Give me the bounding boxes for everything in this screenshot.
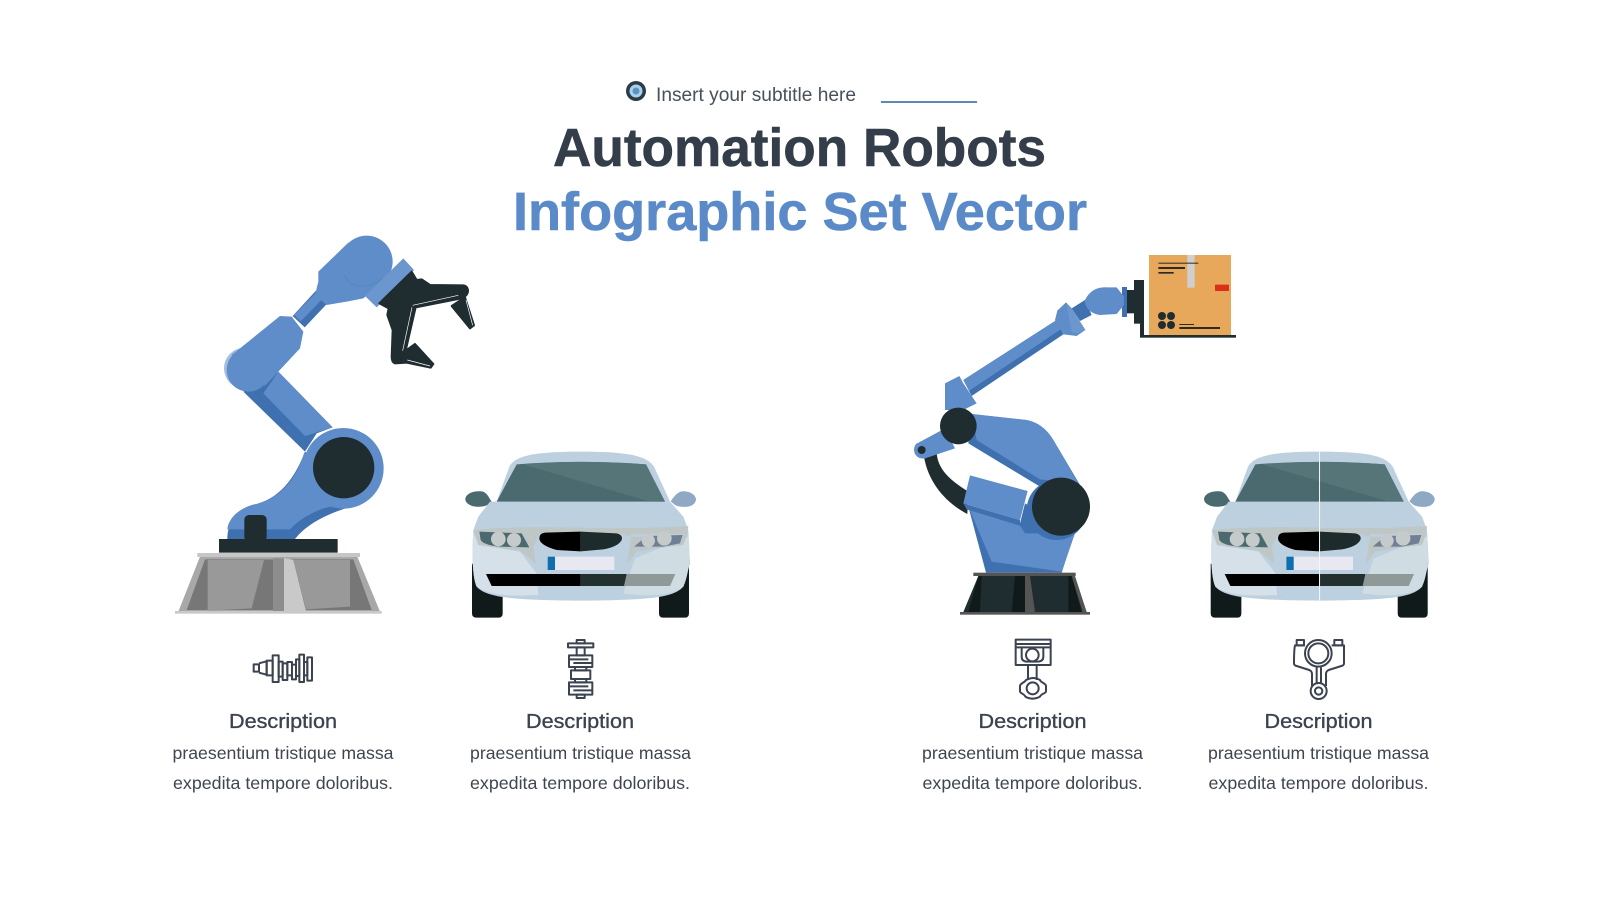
description column 1: praesentium tristique massa	[172, 743, 394, 763]
title line 1: Automation Robots	[553, 118, 1046, 178]
title line 2: Infographic Set Vector	[513, 182, 1087, 242]
mirrors	[1204, 491, 1435, 507]
description column 1	[172, 710, 394, 793]
car body	[1211, 452, 1429, 601]
description column 2: expedita tempore doloribus.	[470, 773, 690, 793]
robot arm with gripper	[175, 236, 474, 614]
dark pedestal	[960, 573, 1090, 615]
grille	[1278, 532, 1319, 551]
description column 4: praesentium tristique massa	[1208, 743, 1429, 763]
long arm	[963, 302, 1085, 396]
description column 1: expedita tempore doloribus.	[173, 773, 393, 793]
description column 3: expedita tempore doloribus.	[922, 773, 1142, 793]
icon: connecting rod	[1294, 640, 1344, 699]
description column 2	[470, 710, 691, 793]
forearm	[224, 236, 414, 392]
lower arm	[219, 452, 370, 553]
windshield	[1235, 462, 1404, 502]
description column 1: Description	[229, 710, 337, 733]
description column 2: praesentium tristique massa	[470, 743, 691, 763]
subtitle row	[626, 81, 977, 106]
license plate	[1286, 557, 1353, 570]
car body	[473, 452, 690, 601]
icon: piston	[1016, 640, 1051, 699]
car 1	[465, 452, 696, 618]
description column 2: Description	[526, 710, 634, 733]
license plate	[548, 557, 614, 570]
windshield	[497, 462, 665, 502]
grille	[539, 532, 581, 551]
gray pedestal	[175, 553, 382, 614]
subtitle text: Insert your subtitle here	[656, 85, 856, 106]
description column 4: Description	[1264, 710, 1372, 733]
shoulder bracket	[945, 376, 977, 410]
icon: camshaft	[254, 655, 312, 682]
mirrors	[465, 491, 696, 507]
wheels	[472, 563, 503, 618]
description column 3	[922, 710, 1143, 793]
description column 3: Description	[978, 710, 1086, 733]
wrist	[1072, 287, 1124, 321]
description column 3: praesentium tristique massa	[922, 743, 1143, 763]
headlights	[1212, 526, 1427, 564]
bumper	[1225, 574, 1319, 586]
icon: subtitle gear	[626, 81, 646, 101]
upper arm	[243, 372, 333, 452]
box holder	[1122, 280, 1236, 338]
subtitle accent line	[881, 101, 977, 103]
center seam	[1319, 451, 1320, 601]
headlights	[473, 526, 688, 564]
car 2	[1204, 451, 1435, 618]
bumper	[486, 574, 581, 586]
wheels	[1211, 563, 1241, 618]
elbow joint	[303, 428, 384, 509]
description column 4: expedita tempore doloribus.	[1208, 773, 1428, 793]
icon: gear stack	[568, 640, 593, 698]
counterweight arc	[924, 453, 968, 514]
joints	[940, 408, 1090, 540]
body	[963, 414, 1080, 573]
cardboard box	[1149, 255, 1231, 336]
gripper	[379, 272, 474, 368]
robot arm with box	[914, 255, 1236, 615]
description column 4	[1208, 710, 1429, 793]
lever	[914, 428, 955, 459]
